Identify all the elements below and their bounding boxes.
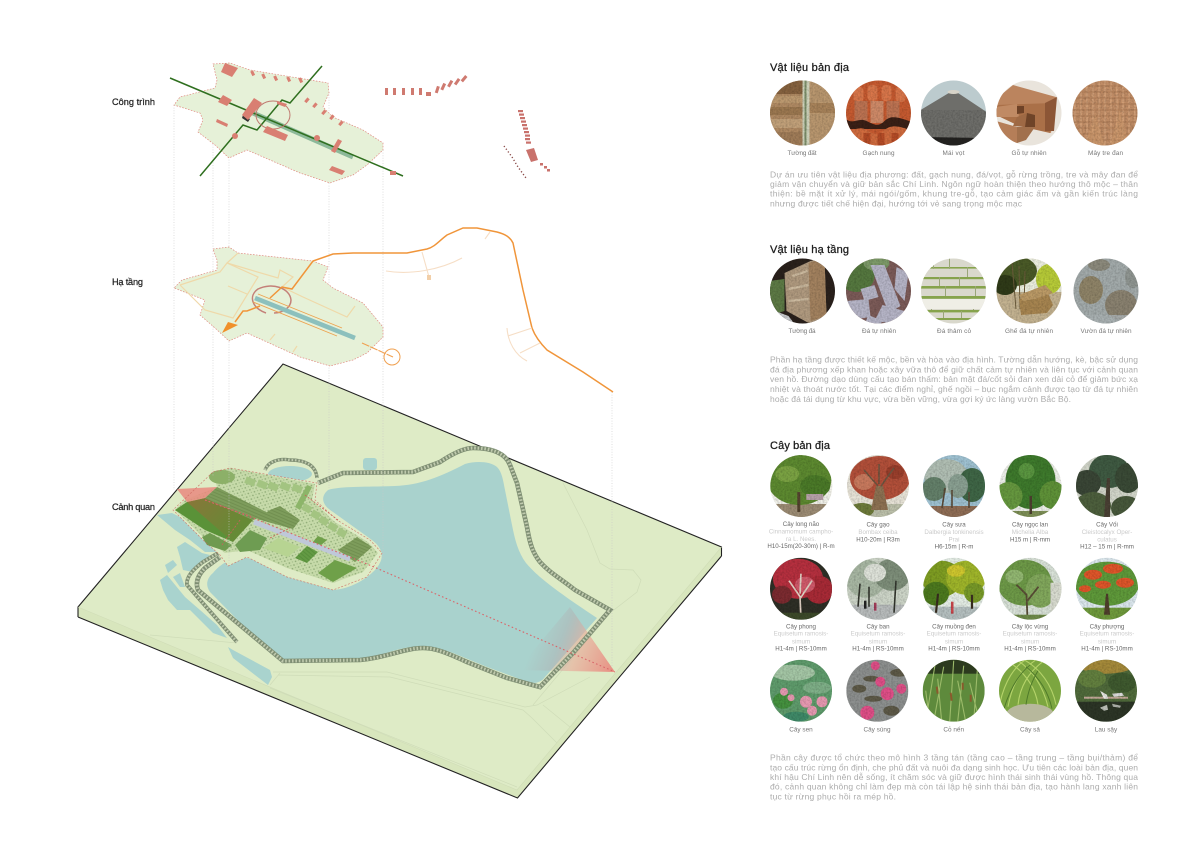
- plant: Cây sen: Cây sen: [789, 726, 813, 733]
- site outline: [174, 247, 383, 366]
- plant: Cây súng: [846, 660, 908, 733]
- tree: Cây gạo: [847, 455, 910, 544]
- text: Vật liệu bản địa: giảm vận chuyển và giữ bản sắc Chí Linh. Ngôn ngữ hoàn thiện theo hướng thô mộc – thân: [770, 179, 1138, 189]
- caption: Mái vọt: [942, 150, 965, 157]
- text: Vật liệu bản địa: nhưng được tiết chế hiện đại, hướng tới vẻ sang trọng mộc mạc: [770, 198, 1023, 208]
- tree: Cây phong: Equisetum ramosis-: [774, 631, 828, 638]
- tree: Cây phượng: H1-4m | RS-10mm: [1081, 646, 1133, 652]
- tree: Cây phượng: Equisetum ramosis-: [1080, 631, 1134, 638]
- text: Vật liệu hạ tầng: hoặc đá tái dụng từ khu vực, vừa bền vững, vừa gợi ký ức làng vườn Bắc Bộ.: [770, 394, 1071, 404]
- plant: Lau sậy: Lau sậy: [1095, 726, 1118, 733]
- photo: Tường đất: [770, 80, 836, 146]
- tree: Cây phong: simum: [792, 638, 810, 645]
- viewpoint cone: south-east: [517, 607, 615, 672]
- green routes: [170, 66, 403, 176]
- label: Cảnh quan: Cảnh quan: [112, 502, 155, 512]
- tree: Cây phượng: simum: [1098, 638, 1116, 645]
- tree: Cây long não: Cây long não: [783, 521, 820, 528]
- plant: Lau sậy: [1075, 656, 1137, 733]
- text: Cây bản địa: tạo cấu trúc rừng ổn định, che phủ đất và nuôi đa dạng sinh học. Ưu tiên các loài bản địa, quen: [770, 762, 1138, 772]
- lake ring: [256, 101, 290, 129]
- label: Công trình: Công trình: [112, 97, 155, 107]
- central axis: [253, 113, 353, 157]
- text: Vật liệu hạ tầng: nhiệt và thoát nước tốt. Tại các điểm nghỉ, ghế ngồi – bục ngắm cảnh được tạo từ đá tự nhiên: [770, 384, 1138, 394]
- site outline: [174, 63, 383, 183]
- tree: Cây Vối: [1076, 455, 1138, 550]
- tree: Cây Vối: H12 – 15 m | R-mm: [1080, 544, 1134, 550]
- main orange road: [235, 228, 613, 392]
- tree: Cây lộc vừng: Cây lộc vừng: [1012, 623, 1049, 630]
- landscape base: isometric site model: [78, 364, 722, 798]
- text: Cây bản địa: [770, 753, 1138, 801]
- plant: Cỏ nến: Cỏ nến: [943, 724, 964, 733]
- tree: Cây sưa: Cây sưa: [942, 522, 966, 528]
- photo: Tường đá: [770, 258, 836, 324]
- text: Vật liệu bản địa: thiện: bề mặt ít xử lý, mái ngói/gốm, khung tre-gỗ, tạo cảm giác ấm và gần kiến trúc làng: [770, 189, 1138, 199]
- tree: Cây ban: simum: [869, 638, 887, 645]
- text: Vật liệu bản địa: Dự án ưu tiên vật liệu địa phương: đất, gạch nung, đá/vọt, gỗ rừng trồng, tre và mây đan để: [770, 169, 1138, 179]
- caption: Gạch nung: [862, 150, 895, 157]
- viewpoint cone: north-west: [187, 498, 253, 542]
- orange arrow: [222, 322, 238, 333]
- tree: Cây muồng đen: H1-4m | RS-10mm: [928, 646, 980, 652]
- caption: Mây tre đan: [1088, 150, 1123, 157]
- plant: Cây sả: [999, 660, 1061, 733]
- photo: Vườn đá tự nhiên: [1073, 258, 1141, 324]
- photo: Gạch nung: [846, 80, 912, 146]
- photo: Ghế đá tự nhiên: [993, 256, 1062, 324]
- photo: Mái vọt: [920, 80, 986, 146]
- far buildings: arc: [385, 75, 467, 96]
- caption: Đá tự nhiên: [862, 328, 896, 335]
- caption: Tường đất: [788, 148, 817, 157]
- text: Vật liệu hạ tầng: ven hồ. Đường dạo dùng cấu tạo bán thấm: bản mặt đá/cốt sỏi đan xen dải cỏ để giảm bức xạ: [770, 374, 1138, 384]
- tree: Cây ban: Cây ban: [866, 623, 890, 630]
- tree: Cây long não: ra L. Nees.: [786, 536, 816, 543]
- tree: Cây muồng đen: simum: [945, 638, 963, 645]
- tree: Cây muồng đen: Cây muồng đen: [932, 623, 976, 630]
- photo: Gỗ tự nhiên: [996, 80, 1062, 146]
- faded side roads: [386, 232, 540, 361]
- text: Cây bản địa: Phần cây được tổ chức theo mô hình 3 tầng tán (tầng cao – tầng trung – tầng bụi/thảm) để: [770, 753, 1138, 763]
- tree lines around lake: [187, 448, 610, 687]
- text: Cây bản địa: đó, cảnh quan không chỉ làm đẹp mà còn tái lập hệ sinh thái bản địa, tạo hành lang xanh liên: [770, 782, 1138, 792]
- tree: Cây lộc vừng: H1-4m | RS-10mm: [1004, 646, 1056, 652]
- island master plan: [173, 468, 382, 590]
- photo: Đá tự nhiên: [846, 258, 911, 324]
- east link and roundabout: [362, 343, 393, 357]
- tree: Cây phong: [770, 558, 833, 652]
- caption: Ghế đá tự nhiên: [1005, 326, 1053, 335]
- tree: Cây sưa: H6-15m | R-m: [935, 544, 973, 550]
- text: Vật liệu hạ tầng: đá địa phương xếp khan hoặc xây vữa thô để giữ chất cảm tự nhiên và liên tục với cảnh quan: [770, 364, 1138, 374]
- text: Vật liệu hạ tầng: Phần hạ tầng được thiết kế mộc, bền và hòa vào địa hình. Tường dẫn hướng, kè, bậc sử dụng: [770, 355, 1138, 365]
- tree: Cây gạo: Cây gạo: [866, 522, 890, 528]
- tree: Cây ngọc lan: H15 m | R-mm: [1010, 536, 1050, 544]
- tree: Cây phượng: [1075, 558, 1139, 652]
- tree: Cây Vối: culatus: [1097, 536, 1117, 544]
- caption: Gỗ tự nhiên: [1012, 148, 1047, 157]
- tree: Cây long não: Cinnamomum campho-: [769, 529, 833, 536]
- heading: Vật liệu bản địa: Vật liệu bản địa: [770, 62, 850, 74]
- plant: Cây súng: Cây súng: [864, 726, 891, 733]
- tree: Cây Vối: Cleistocalyx Oper-: [1082, 529, 1132, 536]
- vertical projection lines: [174, 92, 612, 668]
- tree: Cây phong: Cây phong: [786, 623, 817, 630]
- plant: Cây sen: [770, 660, 832, 733]
- text: Cây bản địa: tục từ rừng phục hồi ra mép hồ.: [770, 791, 896, 801]
- buildings: [216, 63, 396, 175]
- main lake: [207, 462, 597, 683]
- text: Vật liệu hạ tầng: [770, 355, 1138, 404]
- tree: Cây ban: [846, 558, 910, 652]
- text: Vật liệu bản địa: [770, 169, 1138, 208]
- tree: Cây ngọc lan: [1000, 455, 1062, 543]
- tree: Cây ban: Equisetum ramosis-: [851, 631, 905, 638]
- plant: Cỏ nến: [923, 660, 985, 733]
- tree: Cây muồng đen: Equisetum ramosis-: [927, 631, 981, 638]
- caption: Đá thảm cỏ: [937, 327, 971, 335]
- tree: Cây Vối: Cây Vối: [1096, 522, 1118, 528]
- tree: Cây long não: [767, 455, 835, 550]
- internal paths: [180, 253, 355, 352]
- tree: Cây sưa: [922, 455, 986, 550]
- tree: Cây phong: H1-4m | RS-10mm: [775, 646, 827, 652]
- photo: Mây tre đan: [1072, 80, 1138, 146]
- canal: [255, 298, 355, 338]
- plan: Công trình: [170, 63, 550, 183]
- heading: Cây bản địa: Cây bản địa: [770, 440, 831, 452]
- tree: Cây gạo: H10-20m | R3m: [856, 536, 900, 544]
- tree: Cây lộc vừng: simum: [1021, 638, 1039, 645]
- far buildings: east: [518, 110, 550, 172]
- tree: Cây sưa: Dalbergia tonkinensis: [924, 529, 984, 536]
- tree: Cây lộc vừng: Equisetum ramosis-: [1003, 631, 1057, 638]
- photo: Đá thảm cỏ: [920, 258, 986, 324]
- tree: Cây gạo: Bombax ceiba: [858, 529, 898, 536]
- tree: Cây ngọc lan: Cây ngọc lan: [1012, 522, 1049, 528]
- sight line: [205, 500, 615, 672]
- tree: Cây phượng: Cây phượng: [1090, 623, 1125, 630]
- field plots: [175, 476, 372, 582]
- plant: Cây sả: Cây sả: [1020, 726, 1040, 733]
- caption: Vườn đá tự nhiên: [1080, 328, 1132, 335]
- tree: Cây ban: H1-4m | RS-10mm: [852, 646, 904, 652]
- text: Cây bản địa: khí hậu Chí Linh nên dễ sống, ít chăm sóc và giữ được hình thái sinh thái vùng hồ. Thông qua: [770, 772, 1138, 782]
- lake ring: [252, 286, 291, 313]
- tree: Cây lộc vừng: [998, 558, 1062, 652]
- tree: Cây muồng đen: [922, 558, 986, 652]
- west ponds: [157, 458, 377, 685]
- plan: Hạ tầng: [174, 228, 613, 392]
- label: Hạ tầng: Hạ tầng: [112, 277, 143, 287]
- heading: Vật liệu hạ tầng: Vật liệu hạ tầng: [770, 244, 849, 256]
- tree: Cây ngọc lan: Michelia Alba: [1012, 529, 1049, 536]
- caption: Tường đá: [788, 328, 816, 335]
- tree: Cây sưa: Prai: [948, 536, 960, 544]
- tree: Cây long não: H10-15m(20-30m) | R-m: [767, 543, 835, 550]
